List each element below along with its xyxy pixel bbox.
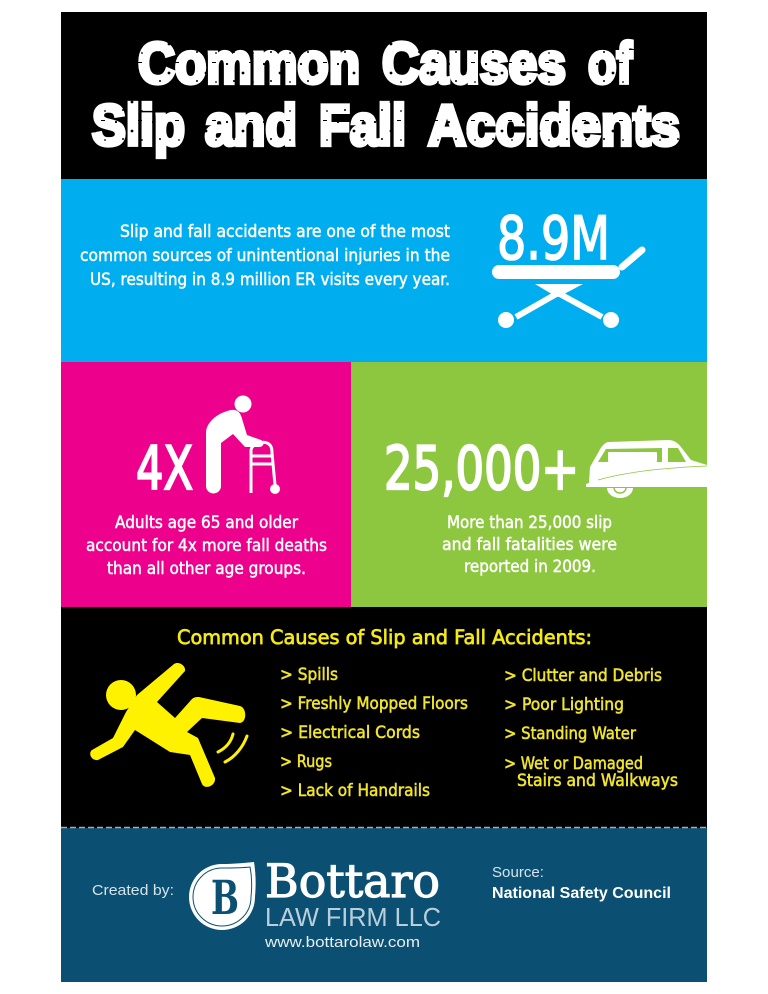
source credit: [492, 865, 671, 902]
title: Fall: [319, 94, 406, 158]
causes list: right column: > Wet or Damaged: [504, 754, 643, 774]
fatalities text: More than 25,000 slip: [447, 513, 612, 532]
older adults text: [86, 513, 327, 578]
causes list: right column: > Clutter and Debris: [504, 666, 662, 686]
panel: footer: [61, 828, 707, 982]
panel: title: [61, 12, 707, 179]
icon: hearse: [586, 440, 707, 498]
panel: older adults: [61, 362, 351, 607]
older adults text: account for 4x more fall deaths: [86, 536, 327, 555]
panel: common causes: [61, 607, 707, 828]
causes list: left column: > Spills: [280, 665, 338, 685]
title: of: [588, 32, 633, 96]
intro text: common sources of unintentional injuries in the: [80, 246, 450, 265]
created by label: Created by:: [92, 882, 174, 899]
icon: falling person: [90, 663, 247, 787]
causes list: right column: > Standing Water: [504, 724, 636, 744]
causes list: left column: > Freshly Mopped Floors: [280, 694, 468, 714]
logo: firm name: www.bottarolaw.com: [264, 935, 420, 951]
title: Common: [138, 32, 360, 96]
causes heading: Common Causes of Slip and Fall Accidents:: [177, 626, 592, 649]
panel: 8.9 million ER visits: [61, 179, 707, 362]
logo: Bottaro shield: [189, 862, 256, 930]
logo: firm name: [264, 854, 441, 951]
causes list: left column: > Electrical Cords: [280, 723, 420, 743]
causes list: right column: > Poor Lighting: [504, 695, 624, 715]
older adults text: than all other age groups.: [107, 559, 306, 578]
title: Accidents: [428, 94, 680, 158]
causes list: right column: [504, 666, 678, 791]
title: and: [205, 94, 297, 158]
stat: 8.9M: 8.9M: [497, 204, 610, 274]
intro text: US, resulting in 8.9 million ER visits every year.: [90, 270, 450, 289]
fatalities text: reported in 2009.: [464, 557, 596, 576]
causes list: left column: > Rugs: [280, 752, 332, 772]
icon: person with walker: [206, 396, 280, 494]
fatalities text: [442, 513, 617, 576]
intro text: [80, 222, 451, 289]
causes list: left column: > Lack of Handrails: [280, 781, 430, 801]
logo: firm name: Bottaro: [265, 854, 440, 908]
older adults text: Adults age 65 and older: [115, 513, 298, 532]
causes list: right column: Stairs and Walkways: [517, 771, 678, 791]
stat: 25,000+: 25,000+: [384, 434, 579, 504]
logo: Bottaro shield: B: [211, 871, 239, 926]
title: Slip: [92, 94, 185, 158]
source credit: Source:: [492, 865, 544, 881]
icon: stretcher: [492, 250, 642, 328]
source credit: National Safety Council: [492, 885, 671, 902]
title: Causes: [382, 32, 566, 96]
stat: 4X: 4X: [136, 434, 193, 504]
title: [85, 32, 685, 158]
fatalities text: and fall fatalities were: [442, 535, 617, 554]
logo: firm name: LAW FIRM LLC: [265, 902, 441, 932]
panel: fatalities: [351, 362, 707, 607]
causes list: left column: [280, 665, 468, 801]
intro text: Slip and fall accidents are one of the most: [120, 222, 451, 241]
